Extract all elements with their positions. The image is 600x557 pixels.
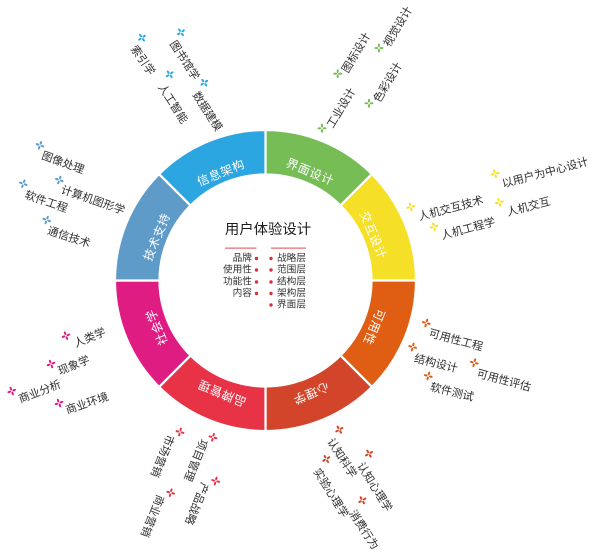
left list: 功能性 — [223, 274, 252, 288]
right list: 战略层 — [277, 251, 306, 264]
labels: 界面设计: 视觉设计 — [380, 4, 415, 49]
labels: 可用性: 可用性评估 — [475, 366, 533, 394]
left red rule — [225, 248, 256, 249]
labels: 品牌管理: 市场营销 — [148, 433, 177, 479]
segment: 心理学: 心理学 — [291, 379, 332, 408]
labels: 交互设计: 人机工程学 — [439, 214, 497, 242]
labels: 信息架构: 图书馆学 — [167, 38, 203, 83]
labels: 可用性 — [407, 318, 533, 404]
labels: 可用性: 软件测试 — [429, 380, 475, 404]
labels: 技术支持: 软件工程 — [23, 188, 70, 215]
labels: 交互设计: 人机交互 — [505, 194, 552, 219]
labels: 信息架构: 数据建模 — [190, 89, 225, 134]
labels: 信息架构: 索引学 — [128, 42, 158, 78]
labels: 品牌管理: 产品战略 — [182, 480, 212, 527]
segment: 社会学 — [115, 280, 191, 387]
labels: 品牌管理: 商业营销 — [138, 493, 167, 539]
labels: 可用性: 结构设计 — [413, 351, 459, 375]
labels: 品牌管理 — [138, 427, 221, 539]
labels: 技术支持: 计算机图形学 — [59, 182, 127, 217]
labels: 心理学: 消费行为 — [346, 507, 382, 552]
center block — [223, 221, 311, 310]
left list: 品牌 — [233, 251, 252, 264]
segment: 交互设计 — [340, 174, 416, 280]
segment: 信息架构: 信息架构 — [195, 156, 247, 189]
labels: 社会学: 商业环境 — [64, 389, 110, 417]
right list: 界面层 — [277, 298, 306, 310]
labels: 界面设计: 工业设计 — [324, 86, 358, 130]
segment: 品牌管理 — [159, 355, 266, 431]
segment: 品牌管理: 品牌管理 — [196, 377, 248, 410]
segment: 技术支持 — [115, 174, 191, 280]
labels: 社会学: 现象学 — [56, 352, 92, 378]
right list: 架构层 — [277, 286, 306, 299]
right list: 范围层 — [277, 262, 306, 276]
segment: 技术支持: 技术支持 — [140, 211, 173, 263]
labels: 心理学: 认知科学 — [324, 435, 360, 480]
labels: 界面设计: 色彩设计 — [370, 60, 405, 105]
labels: 交互设计 — [405, 154, 590, 242]
labels: 交互设计: 人机交互技术 — [417, 193, 485, 223]
labels: 社会学: 商业分析 — [16, 377, 63, 406]
left list — [223, 251, 258, 299]
left list: 内容 — [233, 286, 252, 299]
labels: 品牌管理: 项目管理 — [181, 437, 211, 484]
right list: 结构层 — [277, 274, 306, 288]
right red rule — [271, 248, 306, 249]
labels: 社会学: 人类学 — [72, 325, 108, 350]
labels: 界面设计: 图标设计 — [338, 30, 373, 75]
labels: 信息架构: 人工智能 — [155, 81, 191, 126]
segment: 可用性: 可用性 — [360, 307, 388, 347]
labels: 心理学: 实验心理学 — [311, 466, 352, 520]
labels: 心理学 — [311, 425, 395, 552]
segment: 交互设计: 交互设计 — [357, 209, 390, 261]
labels: 界面设计 — [316, 4, 415, 134]
segment: 信息架构 — [159, 130, 266, 206]
segment: 可用性 — [340, 280, 416, 387]
left list: 使用性 — [223, 262, 252, 276]
labels: 交互设计: 以用户为中心设计 — [500, 154, 590, 191]
segment: 心理学 — [266, 355, 372, 431]
labels: 技术支持: 通信技术 — [46, 224, 92, 250]
labels: 技术支持 — [18, 140, 127, 250]
segment: 社会学: 社会学 — [142, 307, 171, 348]
labels: 信息架构 — [128, 28, 225, 134]
labels: 心理学: 认知心理学 — [354, 460, 395, 514]
labels: 技术支持: 图像处理 — [40, 149, 86, 177]
title: 用户体验设计 — [225, 221, 311, 238]
donut ring — [115, 130, 416, 431]
segment: 界面设计 — [266, 130, 372, 206]
segment: 界面设计: 界面设计 — [284, 156, 336, 188]
right list — [269, 251, 306, 310]
labels: 可用性: 可用性工程 — [427, 326, 485, 354]
labels: 社会学 — [6, 325, 110, 417]
